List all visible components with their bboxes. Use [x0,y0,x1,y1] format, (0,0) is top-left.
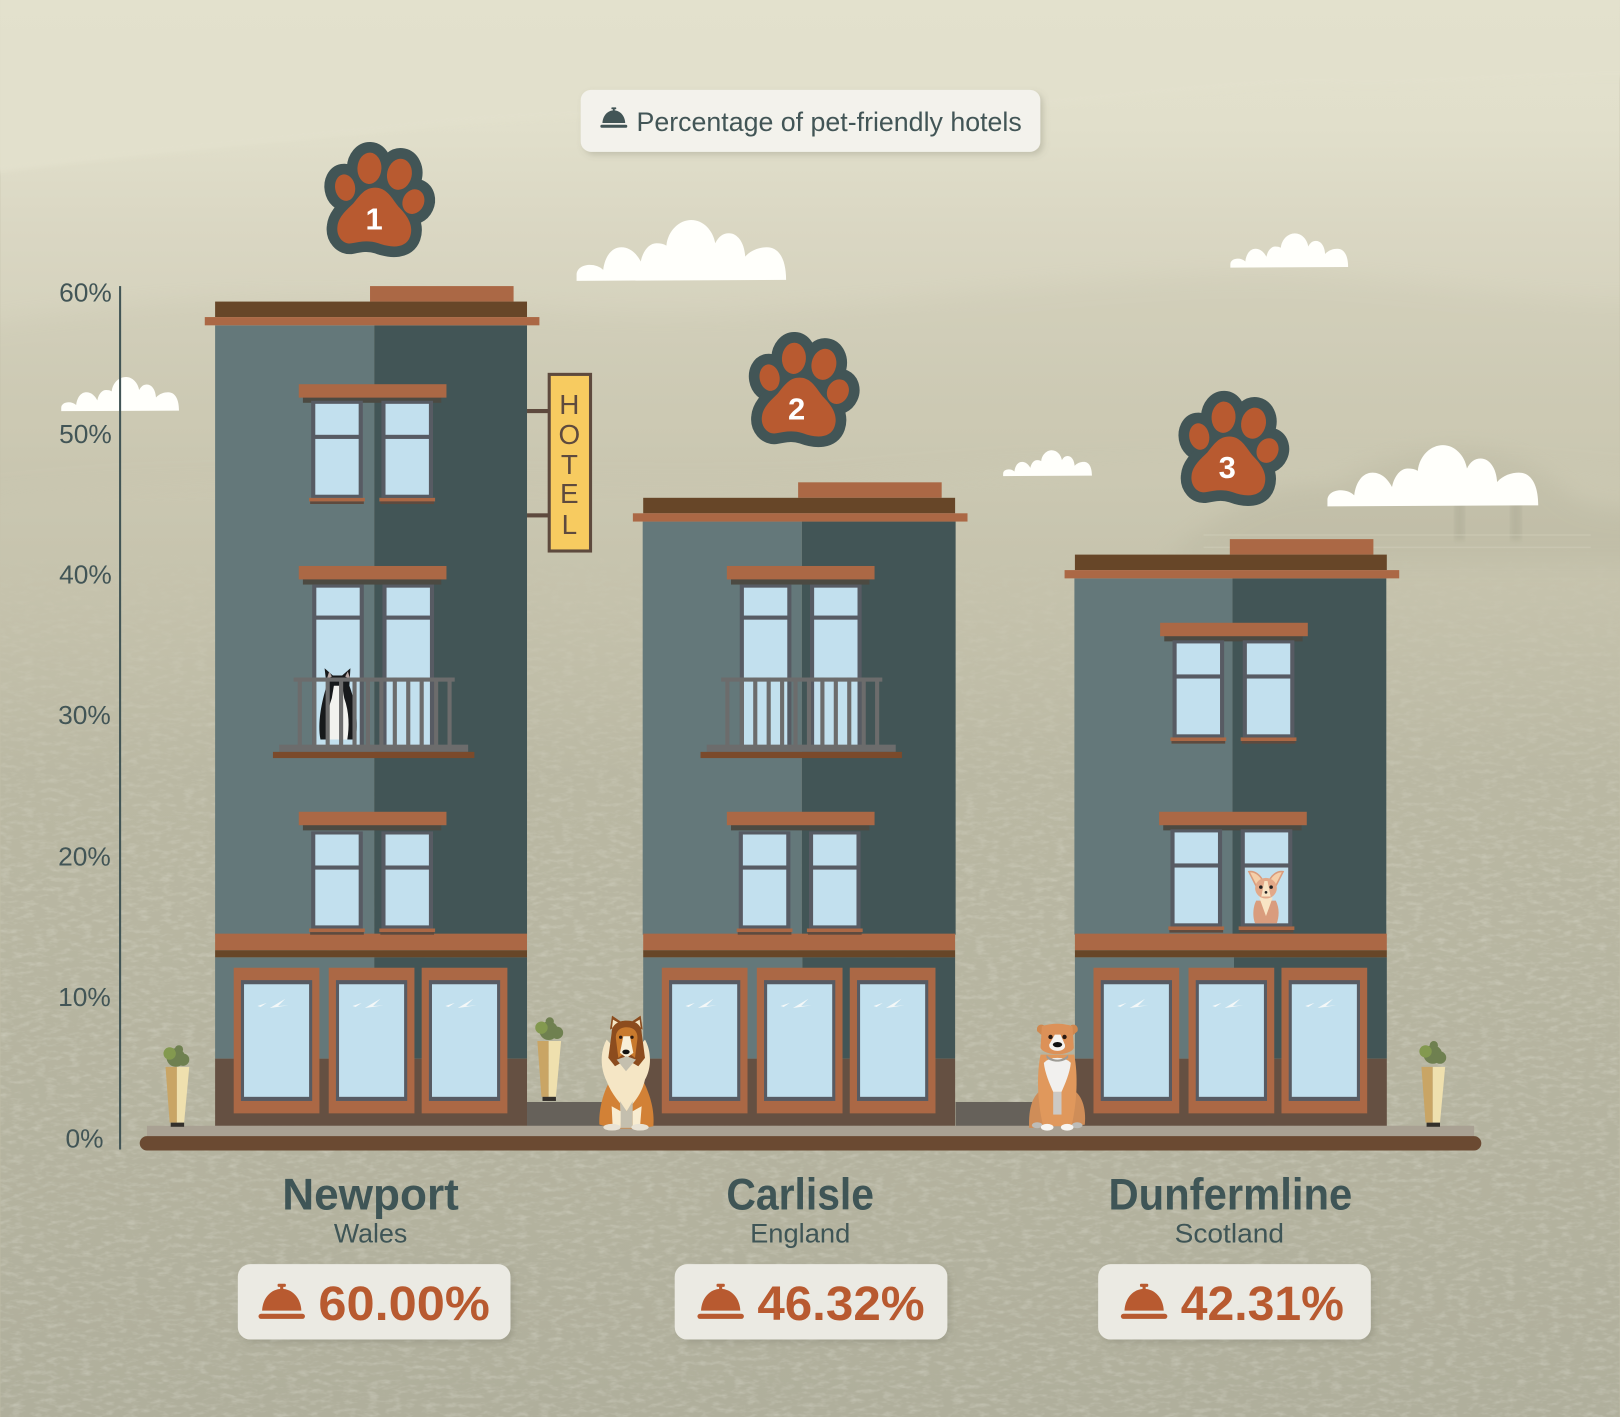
y axis: 10% [58,982,111,1012]
cat on balcony [319,668,357,739]
location: Carlisle [726,1170,874,1248]
location: Dunfermline [1108,1170,1352,1248]
hotel sign: L [562,509,577,540]
location: Dunfermline: Dunfermline [1108,1170,1352,1219]
potted plants [163,1017,1446,1127]
chihuahua in window [1249,872,1283,923]
value card: Newport: 60.00% [318,1277,490,1331]
value card: Carlisle [675,1264,947,1340]
icon: bell [1121,1284,1167,1319]
boxer dog [1029,1024,1085,1131]
location: Carlisle: England [750,1218,850,1248]
icon: bell [258,1284,305,1319]
value card: Dunfermline [1098,1264,1371,1340]
paw badge 1 [333,152,428,246]
location: Dunfermline: Scotland [1175,1218,1284,1248]
y axis: 60% [59,278,112,308]
building: Dunfermline [1065,539,1399,1126]
y axis [58,278,121,1153]
hotel sign: H [559,389,579,420]
y axis: 50% [59,419,112,449]
legend [581,90,1040,152]
paw badge 1: 1 [366,201,383,236]
hotel sign [527,374,591,551]
y axis: 20% [58,841,111,871]
value card: Newport [238,1264,510,1340]
icon: bell [600,107,627,128]
y axis: 40% [59,560,112,590]
y axis: 30% [58,700,111,730]
location: Carlisle: Carlisle [726,1170,874,1219]
building: Newport [205,286,539,1126]
hotel sign: T [561,449,578,480]
paw badge 2: 2 [788,391,805,426]
icon: bell [697,1284,744,1319]
hotel sign: O [559,419,580,450]
paw badge 3 [1187,401,1283,495]
location: Newport [282,1170,459,1248]
building: Carlisle [633,482,968,1126]
collie dog [599,1016,654,1131]
location: Newport: Wales [334,1218,407,1248]
clouds [61,220,1538,506]
street pavement [140,1102,1481,1151]
legend: Percentage of pet-friendly hotels [636,107,1022,137]
value card: Dunfermline: 42.31% [1181,1277,1344,1331]
location: Newport: Newport [282,1170,459,1219]
paw badge 2 [757,342,853,436]
y axis: 0% [66,1123,104,1153]
hotel sign: E [560,478,579,509]
value card: Carlisle: 46.32% [757,1277,925,1331]
paw badge 3: 3 [1219,450,1236,485]
